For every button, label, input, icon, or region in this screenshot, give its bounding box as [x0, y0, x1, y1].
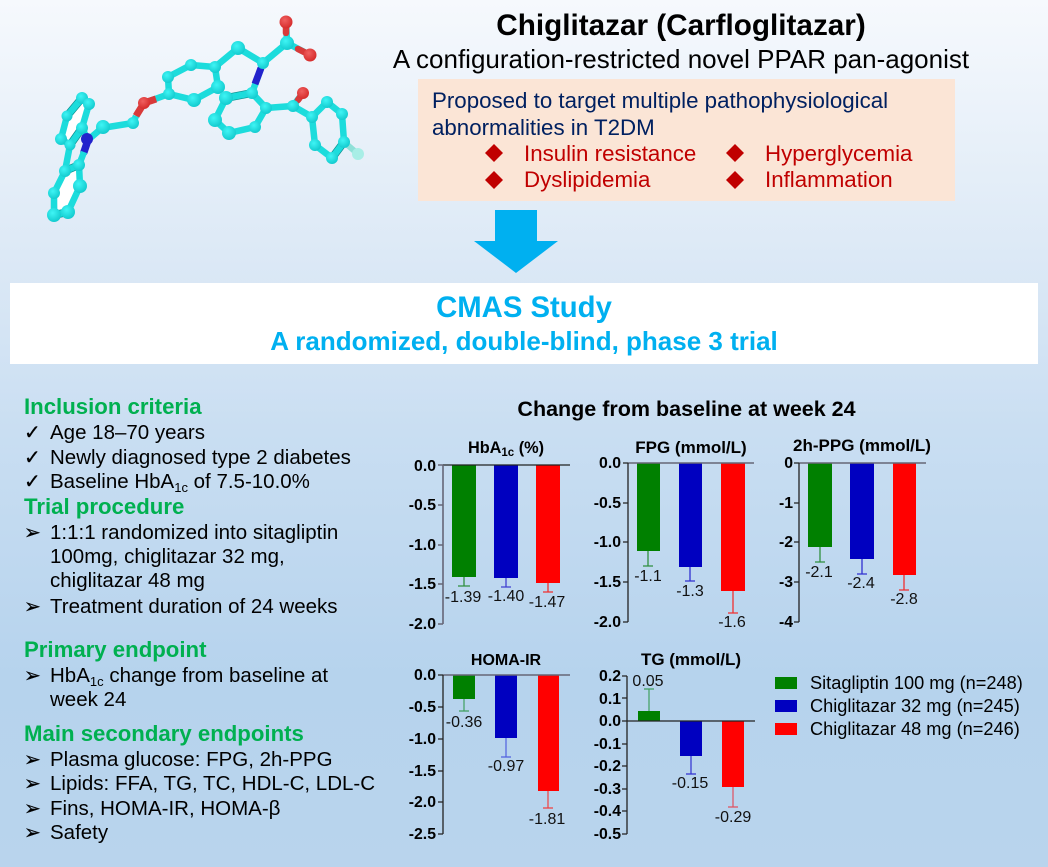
bar chart: HOMA-IR: -2.5	[409, 826, 436, 843]
panel: primary endpoint: ➢	[24, 663, 41, 687]
legend: Chiglitazar 48 mg (n=246)	[810, 719, 1020, 739]
panel: trial procedure: 100mg, chiglitazar 32 mg,	[50, 545, 285, 568]
legend: Chiglitazar 32 mg (n=245)	[810, 696, 1020, 716]
panel: primary endpoint: week 24	[49, 688, 126, 711]
bar chart: FPG: -1.0	[594, 534, 621, 551]
bar chart: HOMA-IR: -1.81	[529, 811, 565, 828]
bar chart: FPG: FPG (mmol/L)	[635, 438, 747, 457]
panel: main secondary endpoints: Safety	[50, 821, 109, 844]
bar chart: 2h-PPG: -4	[779, 614, 793, 631]
bar chart: TG: -0.5	[594, 826, 621, 843]
bar chart: TG: -0.4	[594, 803, 621, 820]
panel: inclusion criteria: 1c	[174, 480, 188, 495]
bar chart: HbA1c: -1.0	[409, 537, 436, 554]
bar chart: TG: -0.2	[594, 758, 621, 775]
bar chart: TG: 0.05	[632, 673, 664, 690]
bar chart: HOMA-IR: -2.0	[409, 794, 436, 811]
target list: Insulin resistance	[524, 141, 696, 166]
panel: main secondary endpoints: ➢	[24, 771, 41, 795]
bar chart: FPG: -1.1	[634, 568, 662, 585]
bar chart: 2h-PPG: 2h-PPG (mmol/L)	[793, 436, 931, 455]
bar chart: HbA1c: -1.39	[445, 589, 481, 606]
panel: trial procedure	[24, 494, 338, 618]
panel: inclusion criteria: Baseline HbA	[50, 470, 174, 493]
bar chart: 2h-PPG: -2.8	[890, 591, 918, 608]
bar chart: TG: -0.29	[715, 809, 751, 826]
bar chart: FPG: -1.5	[594, 574, 621, 591]
bar chart: TG: 0.2	[599, 668, 621, 685]
bar chart: FPG: -1.3	[676, 583, 704, 600]
bar chart: HbA1c: (%)	[514, 439, 544, 457]
target list	[485, 141, 913, 192]
bar chart: TG: TG (mmol/L)	[641, 650, 741, 669]
bar chart: HOMA-IR: -0.36	[446, 714, 482, 731]
bar chart: HOMA-IR: -0.5	[409, 699, 436, 716]
legend: Sitagliptin 100 mg (n=248)	[810, 673, 1023, 693]
bar chart: TG: -0.15	[672, 775, 708, 792]
bar chart: HOMA-IR: 0.0	[414, 667, 436, 684]
molecule: chiglitazar 3D ball-and-stick model	[47, 16, 364, 222]
panel: trial procedure: chiglitazar 48 mg	[50, 569, 205, 592]
bar chart: HOMA-IR: -1.0	[409, 731, 436, 748]
bar chart: FPG: -2.0	[594, 614, 621, 631]
panel: trial procedure: ➢	[24, 520, 41, 544]
study name: CMAS Study	[436, 291, 613, 324]
bar chart: 2h-PPG: -2	[779, 534, 793, 551]
bar chart: HbA1c: 1c	[501, 447, 515, 459]
panel: inclusion criteria: Age 18–70 years	[50, 421, 205, 444]
panel: trial procedure: Trial procedure	[24, 494, 184, 519]
panel: primary endpoint: change from baseline at	[104, 664, 328, 687]
panel: main secondary endpoints: ➢	[24, 747, 41, 771]
panel: main secondary endpoints: Plasma glucose: FPG, 2h-PPG	[50, 748, 333, 771]
bar chart: HOMA-IR	[409, 652, 570, 843]
bar chart: 2h-PPG	[779, 436, 931, 631]
bar chart: 2h-PPG: -1	[779, 495, 793, 512]
panel: primary endpoint	[24, 637, 328, 711]
bar chart: TG	[594, 650, 755, 843]
bar chart: HOMA-IR: -0.97	[488, 758, 524, 775]
panel: inclusion criteria: Inclusion criteria	[24, 394, 202, 419]
panel: inclusion criteria: ✓	[24, 445, 41, 469]
panel: inclusion criteria: of 7.5-10.0%	[188, 470, 310, 493]
bar chart: 2h-PPG: -2.1	[805, 564, 833, 581]
panel: inclusion criteria: ✓	[24, 469, 41, 493]
target list: Hyperglycemia	[765, 141, 913, 166]
study subtitle: A randomized, double-blind, phase 3 trial	[270, 326, 778, 356]
bar chart: HOMA-IR: -1.5	[409, 763, 436, 780]
panel: study banner	[10, 283, 1038, 364]
bar chart: FPG: -1.6	[718, 614, 746, 631]
bar chart: HbA1c: HbA	[468, 439, 501, 457]
bar chart: FPG	[594, 438, 754, 631]
bar chart: FPG: 0.0	[599, 455, 621, 472]
bar chart: 2h-PPG: -3	[779, 574, 793, 591]
bar chart: TG: -0.1	[594, 736, 621, 753]
bar chart: HbA1c: -1.40	[488, 588, 524, 605]
target list: Inflammation	[765, 167, 893, 192]
bar chart: HOMA-IR: HOMA-IR	[471, 652, 542, 669]
bar chart: HbA1c: 0.0	[414, 458, 436, 475]
panel: main secondary endpoints: Lipids: FFA, TG, TC, HDL-C, LDL-C	[50, 772, 375, 795]
panel: primary endpoint: HbA	[50, 664, 90, 687]
panel: primary endpoint: Primary endpoint	[24, 637, 207, 662]
panel: main secondary endpoints	[24, 721, 375, 844]
target description: abnormalities in T2DM	[432, 115, 655, 140]
bar chart: HbA1c: -2.0	[409, 616, 436, 633]
bar chart: 2h-PPG: 0	[784, 455, 793, 472]
bar chart: TG: 0.0	[599, 713, 621, 730]
panel: main secondary endpoints: Main secondary endpoints	[24, 721, 304, 746]
panel: main secondary endpoints: ➢	[24, 796, 41, 820]
panel: trial procedure: Treatment duration of 24 weeks	[50, 595, 338, 618]
bar chart: 2h-PPG: -2.4	[847, 575, 875, 592]
panel: primary endpoint: 1c	[90, 674, 104, 689]
chart heading: Change from baseline at week 24	[517, 397, 856, 421]
panel: inclusion criteria: ✓	[24, 420, 41, 444]
panel: inclusion criteria: Newly diagnosed type 2 diabetes	[50, 446, 351, 469]
legend	[775, 673, 1023, 739]
panel: proposed targets	[418, 79, 955, 201]
target description: Proposed to target multiple pathophysiological	[432, 88, 888, 113]
bar chart: HbA1c: -0.5	[409, 497, 436, 514]
arrow	[474, 210, 558, 273]
bar chart: HbA1c	[409, 439, 570, 633]
bar chart: HbA1c: -1.5	[409, 576, 436, 593]
panel: main secondary endpoints: Fins, HOMA-IR, HOMA-β	[50, 797, 280, 820]
panel: inclusion criteria	[24, 394, 351, 495]
panel: trial procedure: ➢	[24, 594, 41, 618]
panel: trial procedure: 1:1:1 randomized into sitagliptin	[50, 521, 338, 544]
bar chart: TG: -0.3	[594, 781, 621, 798]
target list: Dyslipidemia	[524, 167, 651, 192]
panel: main secondary endpoints: ➢	[24, 820, 41, 844]
bar chart: TG: 0.1	[599, 691, 621, 708]
title: Chiglitazar (Carfloglitazar)	[496, 9, 866, 42]
subtitle: A configuration-restricted novel PPAR pan-agonist	[393, 44, 970, 74]
bar chart: HbA1c: -1.47	[529, 594, 565, 611]
bar chart: FPG: -0.5	[594, 495, 621, 512]
